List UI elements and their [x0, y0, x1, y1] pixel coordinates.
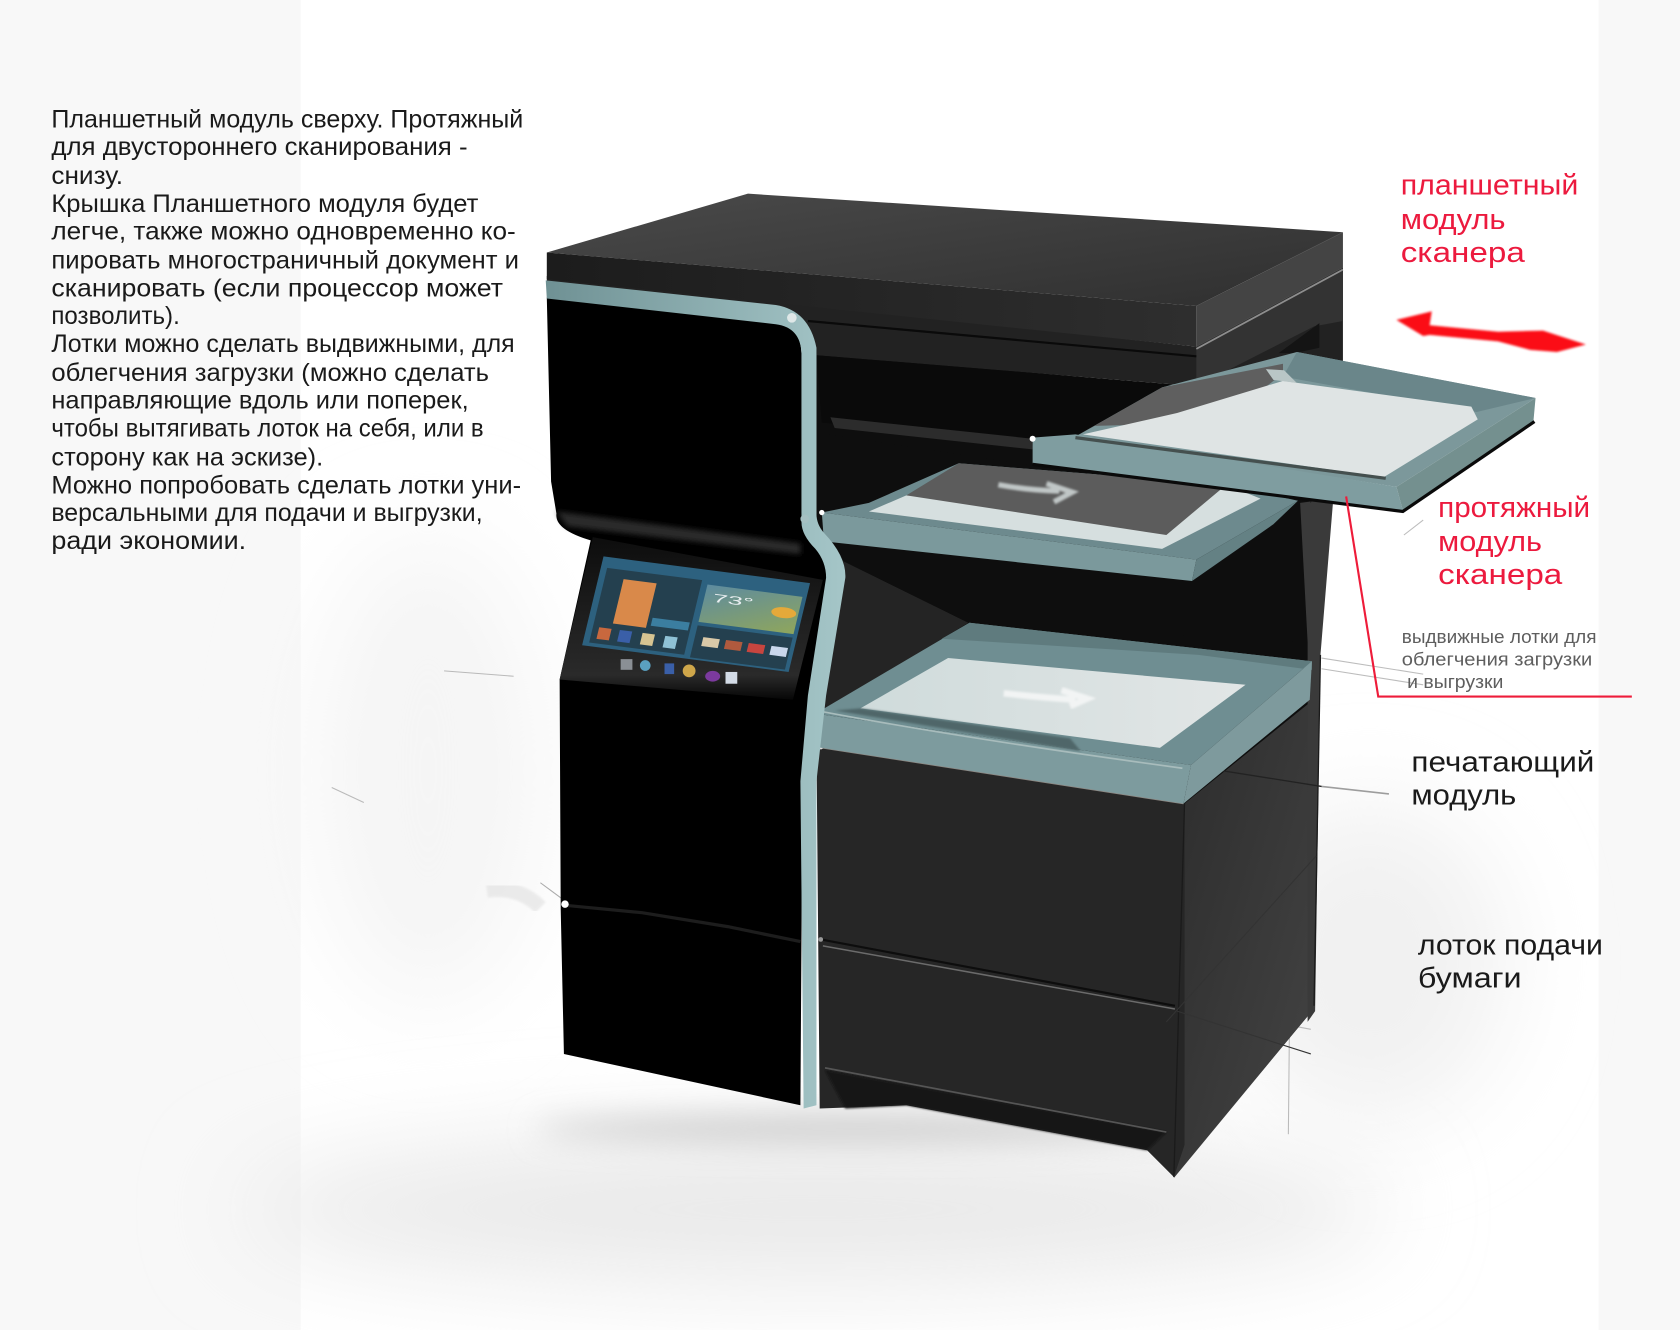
label: sliding trays: выдвижные лотки для — [1402, 627, 1597, 647]
top tray: flatbed pull-out — [1030, 352, 1536, 511]
scanner lower housing — [547, 267, 1343, 642]
label: sliding trays: и выгрузки — [1407, 672, 1503, 692]
body text block: для двустороннего сканирования - — [51, 134, 468, 161]
middle tray: duplex scanner module — [819, 463, 1298, 581]
label: sheet-feed scanner module: модуль — [1438, 526, 1542, 558]
label: sliding trays — [1402, 627, 1597, 692]
glass joints — [787, 313, 797, 323]
tablet screen — [582, 556, 810, 672]
label: flatbed scanner module: планшетный — [1401, 170, 1578, 202]
body text block: ради экономии. — [51, 528, 246, 555]
label: printing module: модуль — [1411, 780, 1516, 812]
label: paper feed tray: бумаги — [1418, 963, 1522, 995]
flatbed scanner lid — [547, 194, 1343, 356]
tablet bezel — [560, 537, 823, 700]
label: flatbed scanner module: сканера — [1401, 237, 1526, 269]
label: printing module: печатающий — [1411, 746, 1594, 778]
column joint line — [564, 905, 800, 942]
body text block: сканировать (если процессор может — [51, 275, 503, 302]
label: paper feed tray: лоток подачи — [1418, 929, 1603, 961]
body text block: позволить). — [51, 303, 180, 330]
label: sheet-feed scanner module — [1438, 492, 1590, 591]
tablet screen: 73° — [711, 592, 755, 610]
body text block: облегчения загрузки (можно сделать — [51, 360, 489, 387]
body text block: Крышка Планшетного модуля будет — [51, 191, 478, 218]
label: paper feed tray — [1418, 929, 1603, 995]
label: sheet-feed scanner module: протяжный — [1438, 492, 1590, 524]
body text block: направляющие вдоль или поперек, — [51, 388, 469, 415]
body text block: чтобы вытягивать лоток на себя, или в — [51, 416, 484, 443]
body text block: снизу. — [51, 163, 123, 190]
printer body: dark rear and side panels — [816, 321, 1333, 1178]
label: flatbed scanner module — [1401, 170, 1578, 269]
body text block — [51, 106, 523, 555]
body text block: сторону как на эскизе). — [51, 444, 323, 471]
label: sliding trays: облегчения загрузки — [1402, 650, 1592, 670]
body text block: Лотки можно сделать выдвижными, для — [51, 331, 515, 358]
arrow: slide direction — [1396, 311, 1586, 352]
label: flatbed scanner module: модуль — [1401, 204, 1506, 236]
sketch marks — [332, 520, 1423, 1134]
label: printing module — [1411, 746, 1594, 812]
tablet dock icons — [621, 659, 737, 684]
body text block: Планшетный модуль сверху. Протяжный — [51, 106, 523, 133]
printer front lines — [818, 655, 1322, 1177]
control column with tablet — [546, 280, 845, 1109]
body text block: версальными для подачи и выгрузки, — [51, 500, 483, 527]
waist highlight band — [556, 511, 800, 554]
label: sheet-feed scanner module: сканера — [1438, 559, 1563, 591]
lower tray: output tray with paper — [815, 623, 1312, 804]
glass strip — [546, 280, 845, 1109]
body text block: Можно попробовать сделать лотки уни- — [51, 472, 521, 499]
body text block: легче, также можно одновременно ко- — [51, 219, 516, 246]
leader line: tray to label — [1346, 496, 1632, 697]
black column — [547, 297, 829, 1105]
body text block: пировать многостраничный документ и — [51, 248, 519, 275]
